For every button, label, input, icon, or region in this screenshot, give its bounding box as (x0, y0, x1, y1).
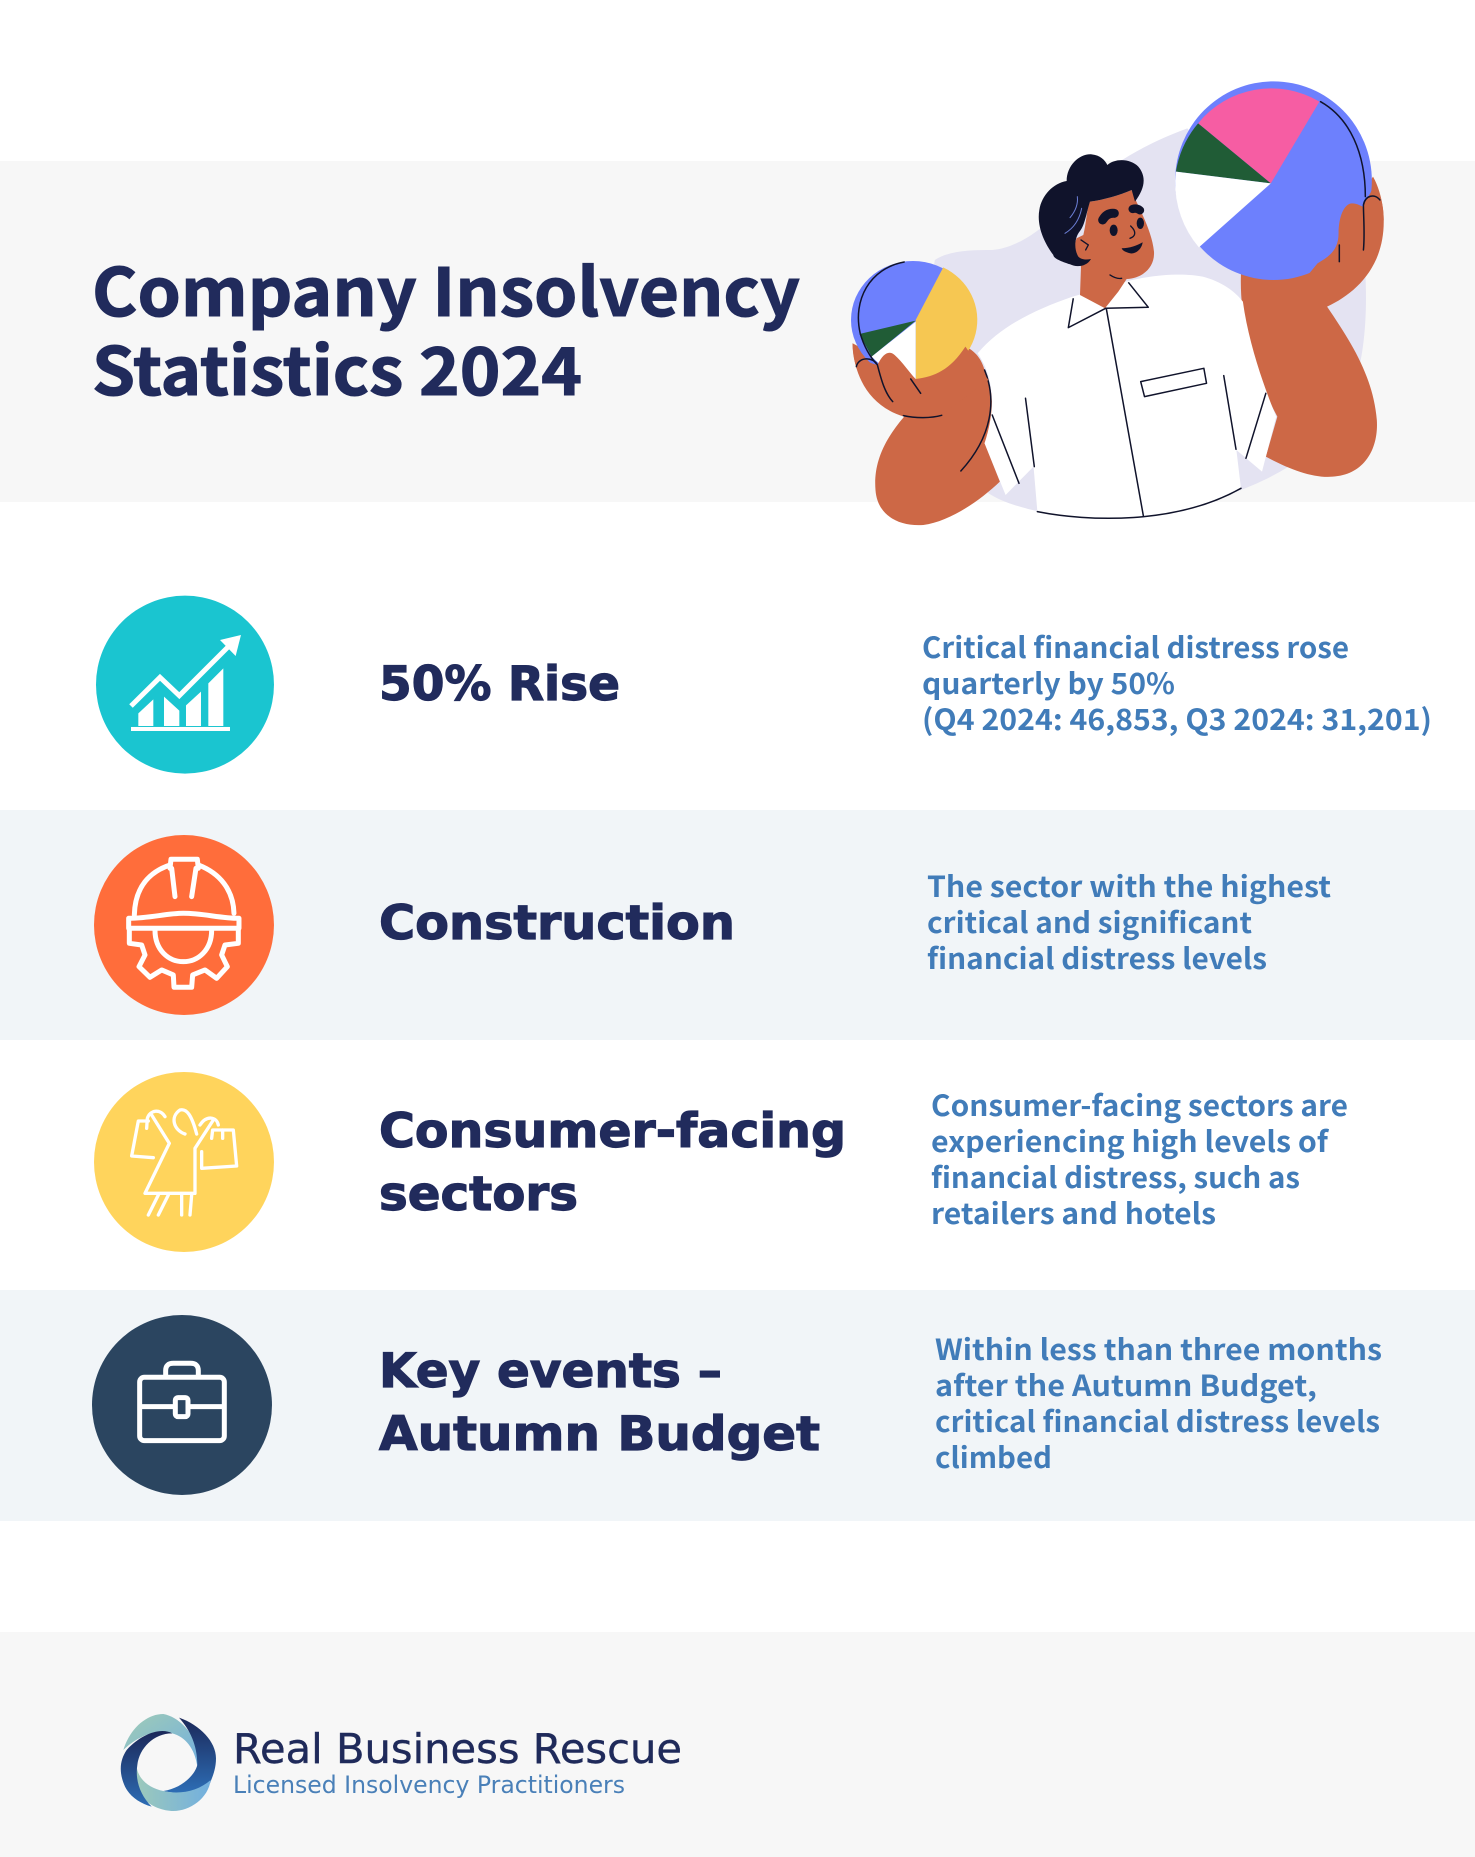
shirt lines (961, 308, 1266, 518)
description: autumn budget: climbed (935, 1435, 1052, 1477)
heading: Key events – Autumn Budget: Key events – (379, 1344, 722, 1399)
heading: Key events – Autumn Budget: Autumn Budget (379, 1407, 820, 1462)
left hand (853, 343, 988, 420)
description: critical financial distress: quarterly by 50% (922, 661, 1175, 703)
icon: rising bar chart (96, 596, 274, 774)
description: sector with highest distress: critical and significant (927, 900, 1252, 942)
description: autumn budget: after the Autumn Budget, (935, 1363, 1317, 1405)
nose (1130, 226, 1135, 238)
small pie chart (851, 261, 977, 379)
row 3: consumer-facing sectors (94, 1072, 1348, 1252)
logo text: tagline: Licensed Insolvency Practitioners (233, 1771, 625, 1799)
description: retailers and hotels: financial distress, such as (931, 1155, 1300, 1197)
logo: Real Business Rescue (121, 1714, 682, 1811)
heading: Consumer-facing sectors (379, 1104, 846, 1222)
row 2: construction (94, 835, 1331, 1015)
panel: header band (0, 161, 1475, 502)
description: critical financial distress: (Q4 2024: 46,853, Q3 2024: 31,201) (922, 697, 1432, 739)
title (92, 240, 800, 415)
eyebrows (1103, 209, 1140, 220)
heading: Key events – Autumn Budget (379, 1344, 820, 1462)
eyes (1110, 218, 1144, 236)
heading: Consumer-facing sectors: sectors (379, 1167, 578, 1222)
description: sector with highest distress: The sector with the highest (927, 864, 1331, 906)
heading: Consumer-facing sectors: Consumer-facing (379, 1104, 846, 1159)
illustration: man holding pie charts (851, 81, 1384, 525)
icon: hard hat and gear (94, 835, 274, 1015)
logo text: name: Real Business Rescue (233, 1725, 682, 1773)
lavender background blob (916, 128, 1366, 518)
head (1039, 154, 1154, 328)
heading: 50% Rise: 50% Rise (379, 657, 620, 712)
row 1: 50% rise (96, 596, 1432, 774)
panel: key events row band (0, 1290, 1475, 1521)
description: autumn budget: Within less than three months (935, 1327, 1382, 1369)
mouth (1122, 242, 1143, 253)
panel: construction row band (0, 810, 1475, 1040)
description: retailers and hotels: experiencing high levels of (931, 1119, 1329, 1161)
left arm (853, 343, 1000, 525)
description: autumn budget: critical financial distress levels (935, 1399, 1380, 1441)
right hand fingers (1298, 182, 1384, 287)
large pie chart (1175, 81, 1372, 280)
panel: footer band (0, 1632, 1475, 1857)
ear and chin lines (1081, 240, 1122, 279)
description: retailers and hotels (931, 1083, 1348, 1233)
right arm (1241, 177, 1384, 477)
description: sector with highest distress: financial distress levels (927, 936, 1267, 978)
icon: shopper with bags (94, 1072, 274, 1252)
hair (1039, 154, 1144, 266)
face and neck (1075, 190, 1154, 308)
hair highlights (1065, 197, 1082, 233)
title: Statistics 2024 (92, 319, 582, 415)
title: Company Insolvency (92, 240, 800, 336)
heading: Construction: Construction (379, 896, 735, 951)
icon: briefcase (92, 1315, 272, 1495)
row 4: key events (92, 1315, 1382, 1495)
description: retailers and hotels: retailers and hotels (931, 1191, 1216, 1233)
description: critical financial distress (922, 625, 1432, 739)
logo mark: ring (121, 1714, 216, 1811)
collar white backing (1068, 282, 1148, 328)
collar lines (1068, 282, 1148, 328)
description: critical financial distress: Critical financial distress rose (922, 625, 1349, 667)
shirt (978, 275, 1276, 519)
description: autumn budget (935, 1327, 1382, 1477)
description: sector with highest distress (927, 864, 1331, 978)
description: retailers and hotels: Consumer-facing sectors are (931, 1083, 1348, 1125)
